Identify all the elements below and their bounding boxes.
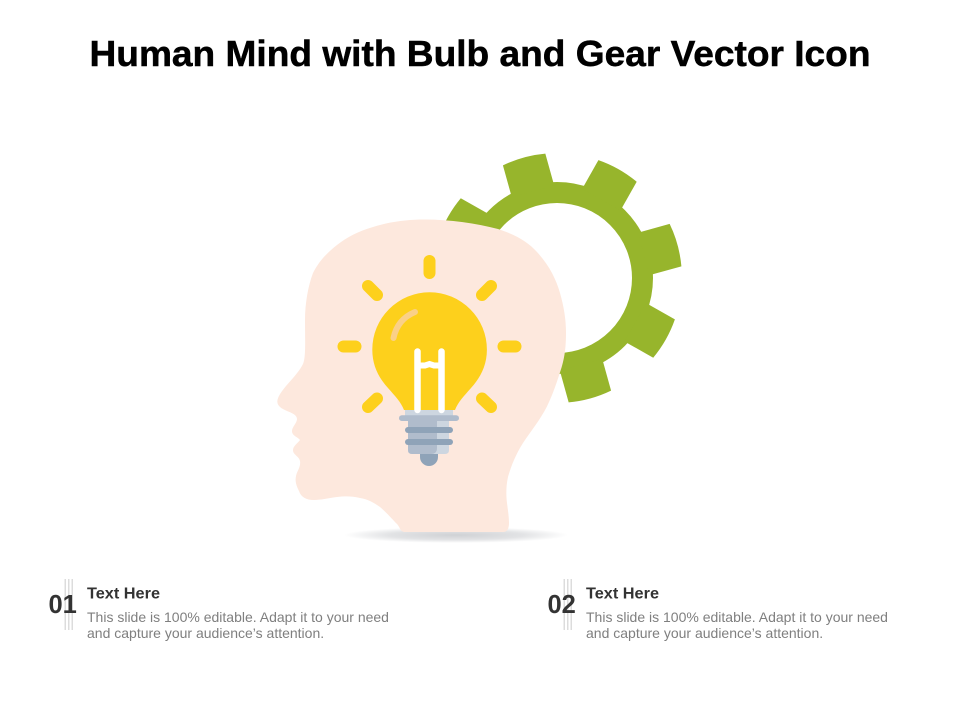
screw cap [399, 409, 459, 466]
number 01: 01 [48, 591, 77, 619]
ground shadow [344, 527, 568, 543]
decorative number lines [564, 579, 572, 630]
body 01: This slide is 100% editable. Adapt it to your need [87, 609, 389, 625]
body 02: and capture your audience’s attention. [586, 625, 823, 641]
heading 01: Text Here [87, 586, 160, 602]
icon: gear [437, 152, 683, 404]
item 01 [48, 579, 389, 641]
glass bulb [372, 292, 487, 410]
bulb highlight [394, 312, 415, 338]
title: Human Mind with Bulb and Gear Vector Icon [90, 33, 870, 74]
item 02 [548, 579, 888, 641]
body 01: and capture your audience’s attention. [87, 625, 324, 641]
number 02: 02 [548, 591, 576, 619]
filament [418, 352, 442, 410]
heading 02: Text Here [586, 586, 659, 602]
decorative number lines [64, 579, 73, 630]
head silhouette [277, 219, 566, 532]
bulb rays [344, 261, 516, 407]
icon: light bulb [344, 261, 516, 466]
body 02: This slide is 100% editable. Adapt it to your need [586, 609, 888, 625]
